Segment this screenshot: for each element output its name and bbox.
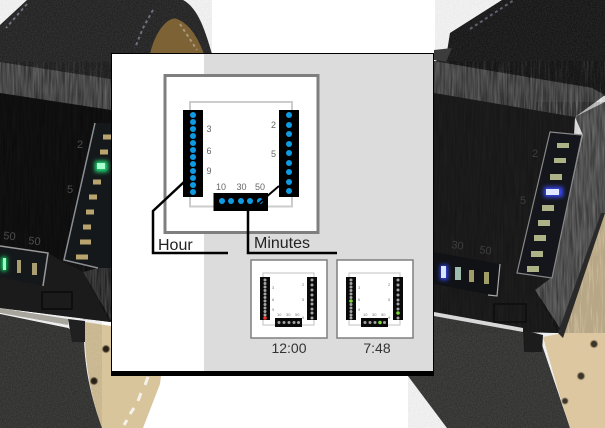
example watch: 12:00 <box>251 260 327 338</box>
right strap top <box>435 0 605 96</box>
left top bevel <box>0 62 111 110</box>
right dial numerals: 30 <box>451 239 464 253</box>
panel grey half <box>204 54 433 371</box>
left logo <box>42 292 72 309</box>
left strap inner lining <box>150 19 204 54</box>
dial numbers <box>206 120 276 192</box>
left minute LEDs <box>76 134 111 260</box>
right strap bottom <box>408 314 570 428</box>
right logo <box>494 304 526 322</box>
main watch diagram <box>165 76 318 232</box>
left dial numerals: 5 <box>67 184 73 196</box>
right blue LED <box>544 187 563 197</box>
minutes units bar <box>279 110 299 197</box>
left hour window <box>0 245 48 286</box>
left strap top <box>0 0 212 80</box>
dial numbers: 3 <box>206 124 212 134</box>
caption 7:48: 7:48 <box>363 340 391 356</box>
right watch face <box>434 93 575 333</box>
left dial numerals: 50 <box>3 230 16 243</box>
right lug bottom <box>523 330 543 352</box>
left dial numerals: 50 <box>28 235 41 248</box>
left clasp highlight <box>0 308 68 325</box>
right top bevel <box>434 61 605 117</box>
right tan strap lining <box>543 213 605 428</box>
label: Minutes: Minutes <box>254 235 310 252</box>
panel background <box>111 53 434 376</box>
right hour window <box>434 252 500 296</box>
dial numbers: 10 <box>216 182 226 192</box>
outer watch square <box>165 76 318 232</box>
minutes pointer lines <box>248 186 337 253</box>
panel: diagram <box>111 53 434 376</box>
right hour LEDs <box>440 265 489 284</box>
right dial numerals: 50 <box>479 244 492 258</box>
right dial numerals: 5 <box>520 195 526 207</box>
left lining white stitches <box>124 377 148 425</box>
left strap holes <box>90 346 110 384</box>
dial numbers: 6 <box>206 146 212 156</box>
left tan strap lining <box>85 322 161 428</box>
dial numbers: 30 <box>236 182 247 192</box>
caption 12:00: 12:00 <box>271 340 307 356</box>
hour pointer line <box>153 182 228 253</box>
right watch photo <box>408 0 605 428</box>
left dial numerals <box>3 139 83 248</box>
dial numbers: 9 <box>206 166 212 176</box>
right strap stitching <box>470 0 514 29</box>
left lug <box>68 319 85 342</box>
panel white half <box>112 54 204 371</box>
dial numbers: 50 <box>255 182 265 192</box>
minutes tens bar <box>214 193 268 211</box>
left strap stitching <box>6 4 153 48</box>
green LEDs <box>349 299 400 324</box>
inner face square <box>190 102 292 206</box>
right dial numerals: 2 <box>532 148 538 160</box>
right minute LEDs <box>527 143 569 272</box>
dial numbers: 5 <box>271 149 276 159</box>
left green LED <box>95 161 108 172</box>
left watch face <box>0 93 111 260</box>
hour bar <box>183 110 203 197</box>
right case base <box>434 93 575 333</box>
left hour LEDs <box>1 257 37 275</box>
right minutes window <box>517 132 582 278</box>
dial numbers: 2 <box>271 120 276 130</box>
left lower case <box>0 253 110 322</box>
right side bevel <box>535 102 605 333</box>
right clasp highlight <box>434 312 523 332</box>
right lug <box>434 48 452 62</box>
left dial numerals: 2 <box>77 139 83 151</box>
left case base <box>0 93 111 322</box>
right case edge <box>558 213 605 338</box>
left minutes window <box>63 123 111 268</box>
left lining stitching <box>180 24 197 50</box>
left watch photo <box>0 0 212 428</box>
red LED <box>263 316 267 320</box>
left strap bottom <box>0 314 102 428</box>
right dial numerals <box>451 148 538 258</box>
example watch: 7:48 <box>337 260 413 338</box>
left side bevel <box>83 262 111 320</box>
right strap holes <box>562 340 598 404</box>
label: Hour: Hour <box>158 237 193 254</box>
